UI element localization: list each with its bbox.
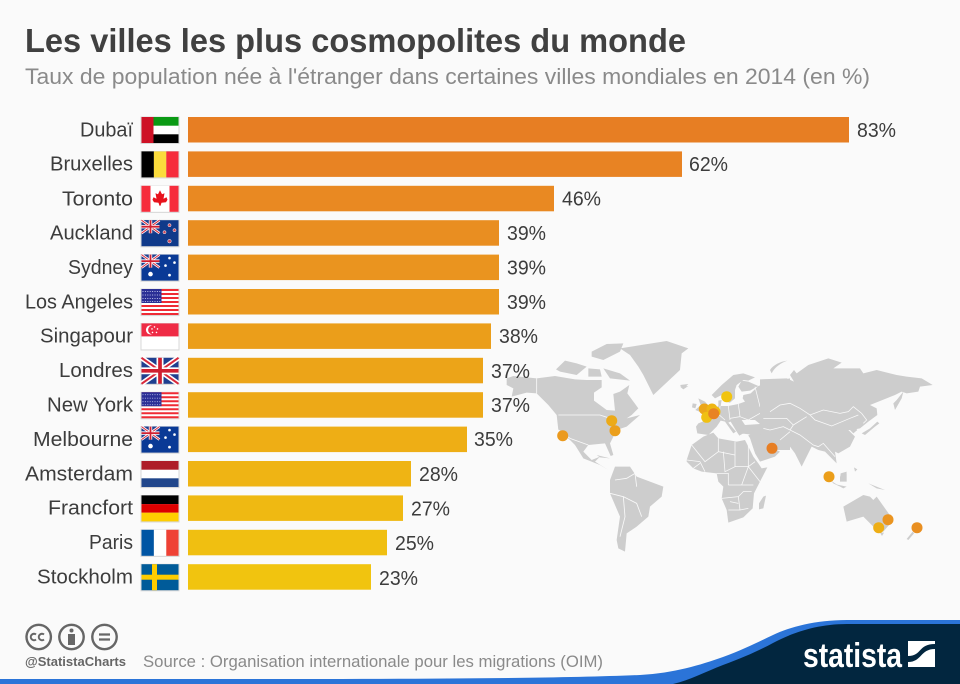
row: Auckland: Auckland [50, 222, 133, 244]
row: Sydney: 39% [507, 256, 546, 280]
row: Auckland: 39% [507, 222, 546, 245]
row: Los Angeles [25, 289, 546, 316]
row: Sydney [68, 254, 546, 282]
map dots: cities [557, 391, 922, 533]
row: Los Angeles: 39% [507, 291, 546, 314]
row: Londres [59, 357, 530, 385]
statista logo: statista [803, 637, 903, 675]
row: Paris [89, 529, 434, 557]
row: Londres: Londres [59, 359, 133, 382]
row: Dubaï: Dubaï [80, 118, 133, 142]
world map [507, 341, 933, 552]
map: Asia [760, 358, 933, 479]
row: Dubaï: 83% [857, 119, 896, 142]
row: Toronto [62, 185, 601, 213]
handle: @StatistaCharts [25, 655, 126, 669]
row: Sydney: Sydney [68, 256, 134, 279]
map: Indonesia, Australia and New Zealand [825, 473, 914, 540]
footer band [0, 620, 960, 684]
subtitle: Taux de population née à l'étranger dans certaines villes mondiales en 2014 (en %) [25, 64, 870, 89]
row: Bruxelles: Bruxelles [50, 152, 133, 176]
row: Melbourne: Melbourne [33, 428, 133, 451]
row: Francfort: Francfort [48, 496, 133, 520]
row: Dubaï [80, 116, 896, 144]
row: Stockholm: Stockholm [37, 566, 133, 588]
row: Singapour: 38% [499, 325, 538, 348]
row: Los Angeles: Los Angeles [25, 290, 133, 314]
row: Bruxelles [50, 151, 728, 178]
row: Amsterdam [25, 461, 458, 488]
row: New York: New York [47, 394, 134, 416]
map: Americas and Greenland [507, 341, 688, 552]
row: Toronto: 46% [562, 188, 601, 210]
row: Francfort: 27% [411, 498, 450, 520]
row: Singapour: Singapour [40, 324, 133, 348]
row: Stockholm [37, 564, 418, 591]
source: Source : Organisation internationale pour les migrations (OIM) [143, 652, 603, 671]
row: Paris: Paris [89, 531, 133, 554]
row: Auckland [50, 220, 546, 247]
row: Toronto: Toronto [62, 188, 133, 210]
row: Melbourne [33, 426, 513, 454]
row: Melbourne: 35% [474, 428, 513, 451]
row: Francfort [48, 495, 450, 522]
map: Africa and Middle East [687, 433, 780, 523]
title: Les villes les plus cosmopolites du monde [25, 22, 686, 59]
row: Paris: 25% [395, 532, 434, 555]
row: Londres: 37% [491, 360, 530, 383]
row: Singapour [40, 323, 538, 350]
row: New York [47, 392, 530, 419]
icon: creative commons licence [26, 625, 117, 649]
row: Amsterdam: Amsterdam [25, 462, 133, 486]
map: Europe [680, 373, 790, 450]
row: New York: 37% [491, 394, 530, 417]
row: Amsterdam: 28% [419, 463, 458, 486]
row: Stockholm: 23% [379, 567, 418, 590]
row: Bruxelles: 62% [689, 153, 728, 176]
